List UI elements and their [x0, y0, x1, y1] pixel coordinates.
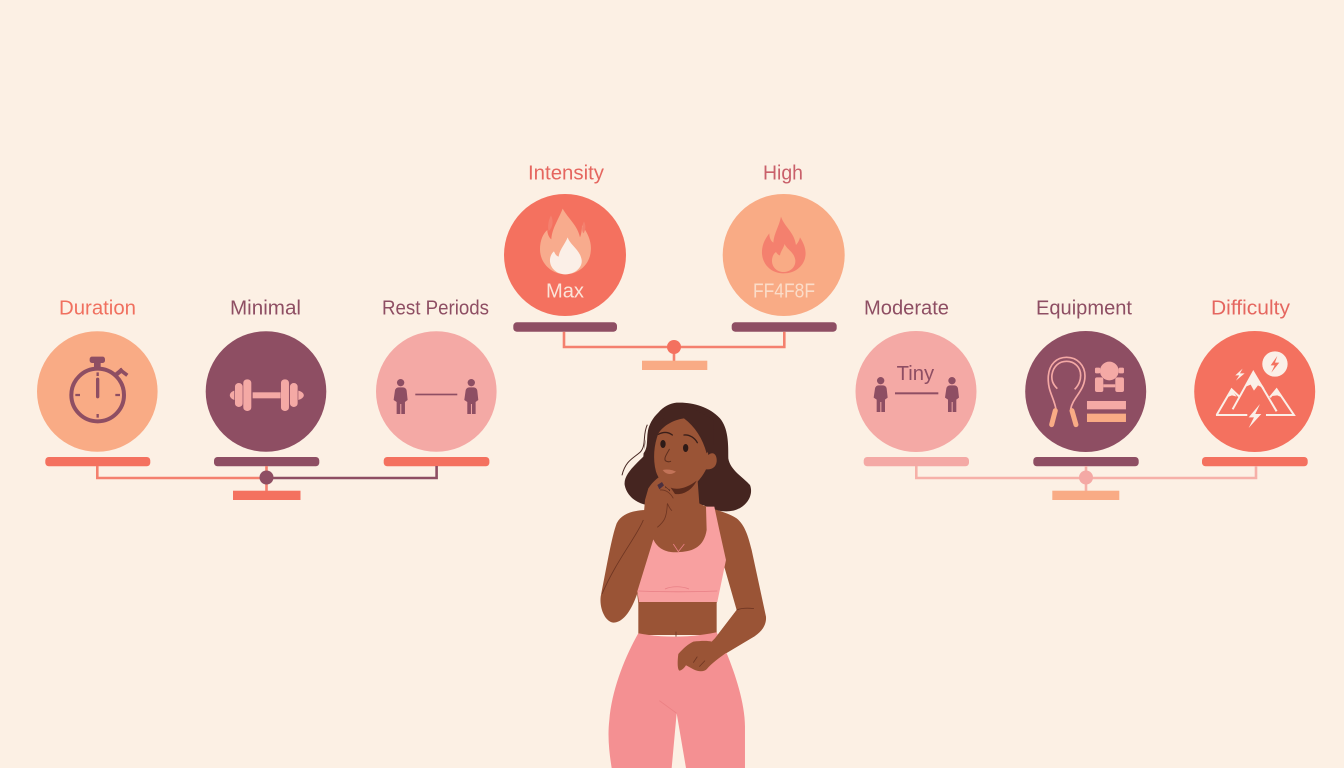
circle: Duration — [37, 331, 158, 452]
bar: Equipment — [1033, 457, 1139, 466]
icon: small flame — [762, 217, 806, 273]
hair front — [658, 407, 713, 453]
icon: gym weights and mats — [1087, 362, 1126, 422]
panel: left group — [37, 298, 497, 500]
label: Moderate: Moderate — [864, 298, 949, 320]
torso and arms — [600, 477, 766, 655]
text: Max: Max — [546, 280, 584, 302]
icon: dumbbell — [230, 379, 304, 411]
facial features — [658, 433, 697, 462]
face — [654, 416, 717, 493]
bar: Intensity — [513, 322, 617, 332]
hand at chin — [643, 476, 674, 527]
text: FF4F8F: FF4F8F — [753, 280, 815, 302]
illustration: thinking woman — [600, 403, 766, 768]
leggings — [609, 632, 745, 768]
circle: Difficulty — [1194, 331, 1315, 452]
panel: right group — [856, 298, 1315, 500]
hair strand — [622, 424, 649, 476]
circle: Intensity — [504, 194, 626, 316]
circle: Moderate — [856, 331, 976, 452]
label: Difficulty: Difficulty — [1211, 298, 1290, 320]
label: Equipment: Equipment — [1036, 298, 1132, 320]
finger lines — [602, 490, 754, 667]
bar: Rest Periods — [384, 457, 489, 466]
connector: right scale — [916, 466, 1256, 491]
circle: Rest Periods — [376, 331, 497, 452]
top band line — [638, 544, 717, 592]
icon: two people with Tiny gap — [874, 377, 959, 412]
base: right scale — [1052, 491, 1119, 500]
bar: Minimal — [214, 457, 319, 466]
icon: two people apart — [394, 379, 478, 414]
leg crease — [659, 701, 677, 713]
label: Intensity: Intensity — [528, 162, 604, 184]
bar: Duration — [45, 457, 150, 466]
panel: top group — [504, 162, 845, 370]
circle: Equipment — [1025, 331, 1146, 452]
base: left scale — [233, 491, 300, 500]
forearm and hand on hip — [678, 610, 755, 671]
circle: Minimal — [206, 331, 326, 452]
mouth — [663, 469, 676, 474]
connector: left scale — [97, 466, 437, 491]
bar: Difficulty — [1202, 457, 1308, 466]
label: Rest Periods: Rest Periods — [382, 298, 489, 320]
icon: jump rope — [1048, 357, 1085, 425]
icon: mountains and lightning — [1216, 351, 1294, 428]
hair back — [625, 403, 751, 511]
icon: stopwatch — [71, 357, 127, 421]
jaw shadow — [671, 481, 697, 494]
base: top scale — [642, 361, 707, 370]
bar: High — [732, 322, 837, 332]
label: Duration: Duration — [59, 298, 136, 320]
sports top — [637, 507, 726, 602]
text: Tiny: Tiny — [897, 363, 934, 385]
fingernail — [657, 482, 664, 489]
label: Minimal: Minimal — [230, 298, 301, 320]
label: High: High — [763, 162, 803, 184]
bar: Moderate — [864, 457, 969, 466]
circle: High — [723, 194, 845, 316]
icon: large flame — [540, 209, 591, 274]
connector: top scale — [564, 332, 784, 361]
